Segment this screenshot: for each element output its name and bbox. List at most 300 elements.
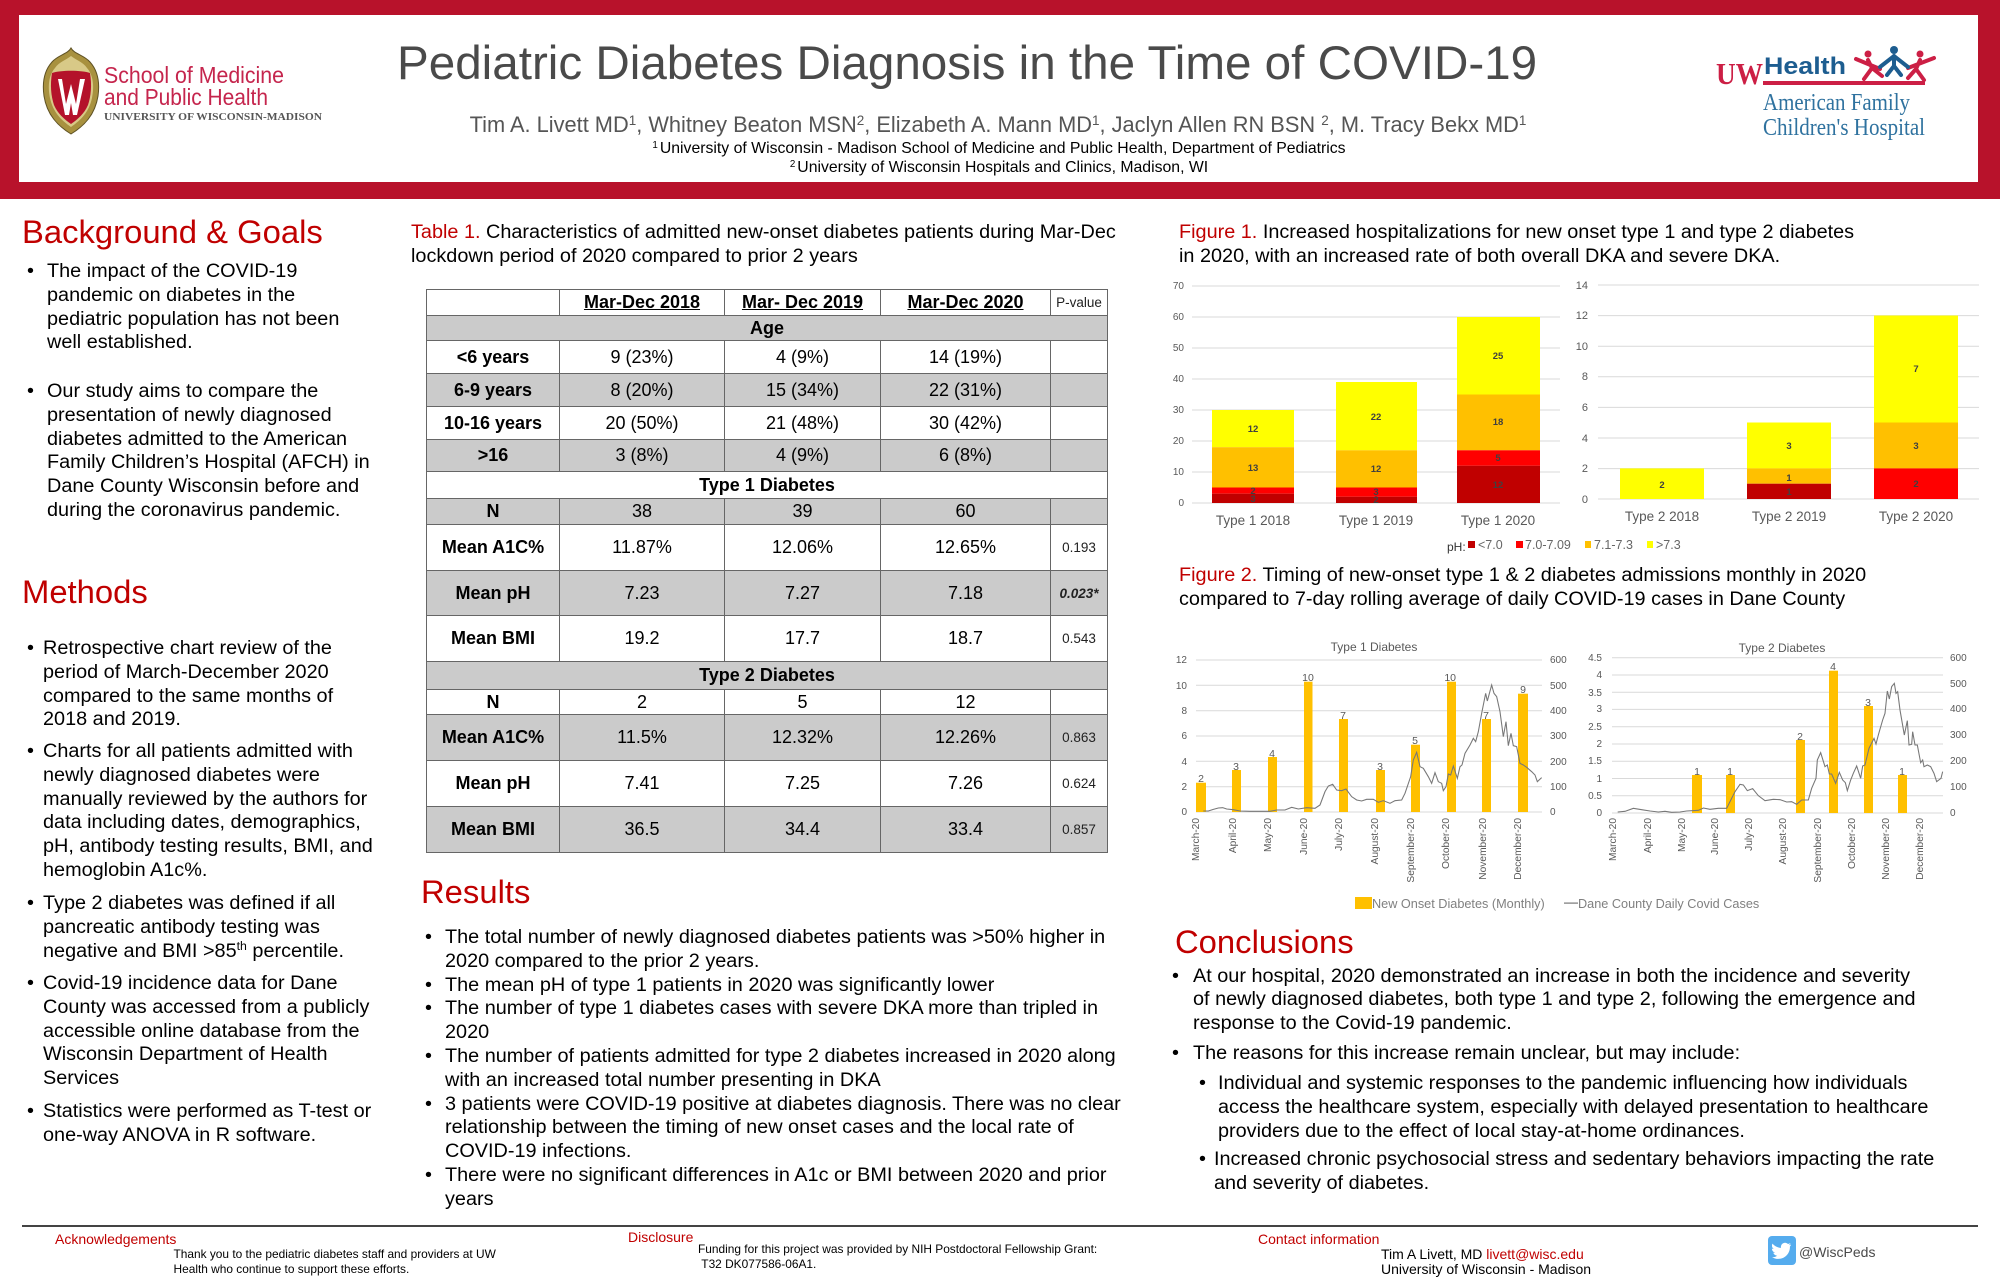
methods bullet 5 — [27, 1100, 371, 1146]
results bullets: The number of patients admitted for type 2 diabetes increased in 2020 along — [445, 1045, 1116, 1067]
table 1: patient characteristics: 0.543 — [1062, 631, 1096, 646]
table 1: patient characteristics: Mean pH — [455, 773, 530, 793]
chart: type 2 monthly admissions and covid cases: 100 — [1950, 782, 1967, 793]
heading: conclusions: Conclusions — [1175, 923, 1354, 960]
chart: type 2 monthly admissions and covid cases: April-20 — [1643, 818, 1654, 853]
table 1: patient characteristics: 8 (20%) — [610, 380, 674, 400]
results bullets: years — [445, 1188, 494, 1210]
conclusions bullet 2: The reasons for this increase remain unclear, but may include: — [1193, 1042, 1740, 1064]
methods bullet 2: pH, antibody testing results, BMI, and — [43, 835, 373, 857]
logo text: and Public Health — [104, 84, 268, 110]
table 1: patient characteristics: 15 (34%) — [766, 380, 839, 400]
table 1: patient characteristics: 36.5 — [624, 819, 660, 839]
chart: type 2 monthly admissions and covid cases: June-20 — [1710, 818, 1721, 855]
chart: type 1 stacked bars by pH: 30 — [1173, 405, 1184, 416]
chart: type 1 monthly admissions and covid cases: 12 — [1176, 655, 1187, 666]
chart: type 1 monthly admissions and covid cases: 200 — [1550, 757, 1567, 768]
chart: type 1 stacked bars by pH: 2 — [1250, 486, 1256, 497]
icon: three holding-hands children — [1856, 46, 1934, 80]
chart: type 1 stacked bars by pH: 18 — [1493, 417, 1503, 428]
chart: type 1 monthly admissions and covid cases: July-20 — [1334, 818, 1345, 851]
table 1: patient characteristics: 7.26 — [948, 773, 983, 793]
table 1: patient characteristics: 7.41 — [624, 773, 660, 793]
methods bullet 2: newly diagnosed diabetes were — [43, 764, 320, 786]
chart: type 2 monthly admissions and covid cases: August-20 — [1778, 818, 1789, 864]
panel: methods: • — [27, 1100, 34, 1122]
legend: diabetes and covid series: Dane County Daily Covid Cases — [1578, 897, 1759, 911]
table 1: patient characteristics: Mar-Dec 2018 — [584, 292, 700, 312]
background bullet 2: presentation of newly diagnosed — [47, 404, 332, 426]
chart: type 2 stacked bars by pH: 2 — [1659, 480, 1665, 491]
chart title: type 1: Type 1 Diabetes — [1331, 640, 1417, 654]
chart: type 2 monthly admissions and covid cases: 2.5 — [1588, 722, 1602, 733]
chart: type 2 monthly admissions and covid cases: March-20 — [1608, 818, 1619, 861]
chart: type 2 stacked bars by pH: 3 — [1913, 441, 1919, 452]
disclosure text — [698, 1242, 1097, 1271]
panel: results: • — [425, 974, 432, 996]
chart: type 1 stacked bars by pH — [1173, 281, 1560, 528]
background bullet 2: Our study aims to compare the — [47, 380, 318, 402]
footer: contact information — [1258, 1231, 1591, 1277]
chart: type 2 monthly admissions and covid cases: 1 — [1727, 766, 1733, 778]
chart: type 1 monthly admissions and covid cases: 400 — [1550, 706, 1567, 717]
conclusions bullet 1: At our hospital, 2020 demonstrated an increase in both the incidence and severity — [1193, 965, 1910, 987]
twitter handle text: @WiscPeds — [1799, 1244, 1875, 1260]
figure 2 caption: Figure 2. Timing of new-onset type 1 & 2 diabetes admissions monthly in 2020 — [1179, 564, 1866, 586]
results bullets: 3 patients were COVID-19 positive at diabetes diagnosis. There was no clear — [445, 1093, 1121, 1115]
chart: type 1 stacked bars by pH: 12 — [1493, 480, 1503, 491]
contact details: Tim A Livett, MD livett@wisc.edu — [1381, 1246, 1584, 1262]
table 1: patient characteristics — [426, 289, 1108, 853]
legend: pH categories: 7.1-7.3 — [1594, 538, 1633, 552]
conclusions sub-bullet 2 — [1199, 1148, 1934, 1194]
chart: type 2 stacked bars by pH: 7 — [1913, 364, 1919, 375]
chart: type 2 stacked bars by pH: 1 — [1786, 487, 1792, 498]
table 1: patient characteristics: 38 — [632, 501, 652, 521]
chart: type 2 monthly admissions and covid cases: 4.5 — [1588, 653, 1602, 664]
conclusions bullet 1: response to the Covid-19 pandemic. — [1193, 1012, 1512, 1034]
chart: type 1 stacked bars by pH: 3 — [1373, 487, 1379, 498]
table 1: patient characteristics: 12.06% — [772, 537, 833, 557]
background bullet 1: pediatric population has not been — [47, 308, 339, 330]
disclosure text: T32 DK077586-06A1. — [701, 1257, 816, 1271]
chart: type 1 monthly admissions and covid cases: 500 — [1550, 681, 1567, 692]
chart: type 1 monthly admissions and covid cases: 8 — [1181, 706, 1187, 717]
table 1: patient characteristics: 4 (9%) — [776, 346, 829, 366]
chart: type 2 stacked bars by pH: Type 2 2018 — [1625, 509, 1699, 524]
chart: type 1 monthly admissions and covid cases: 0 — [1181, 807, 1187, 818]
chart: type 1 stacked bars by pH: 3 — [1250, 494, 1256, 505]
table 1: patient characteristics: Type 2 Diabetes — [699, 665, 835, 685]
methods bullet 4: Services — [43, 1067, 119, 1089]
chart title: type 2: Type 2 Diabetes — [1739, 641, 1825, 655]
UW Health wordmark: Health — [1764, 53, 1846, 80]
table 1: patient characteristics: 39 — [792, 501, 813, 521]
hospital name — [1763, 90, 1925, 141]
results bullets: 2020 compared to the prior 2 years. — [445, 950, 759, 972]
chart: type 2 monthly admissions and covid cases: 1.5 — [1588, 756, 1602, 767]
disclosure text: Funding for this project was provided by NIH Postdoctoral Fellowship Grant: — [698, 1242, 1097, 1256]
table 1: patient characteristics: 12.26% — [935, 727, 996, 747]
chart: type 2 monthly admissions and covid cases — [1588, 641, 1967, 883]
chart: type 1 stacked bars by pH: 60 — [1173, 312, 1184, 323]
panel: results: • — [425, 1045, 432, 1067]
chart: type 1 monthly admissions and covid cases: 4 — [1181, 757, 1187, 768]
table 1: patient characteristics: 3 (8%) — [615, 445, 668, 465]
chart: type 1 monthly admissions and covid cases: 10 — [1444, 672, 1456, 684]
chart: type 1 monthly admissions and covid cases: 3 — [1233, 761, 1239, 773]
background bullet 2: Dane County Wisconsin before and — [47, 475, 359, 497]
header band — [0, 0, 2000, 199]
methods bullet 1 — [27, 637, 334, 730]
figure 1 caption: Figure 1. Increased hospitalizations for new onset type 1 and type 2 diabetes — [1179, 221, 1854, 243]
chart: type 1 monthly admissions and covid cases: 7 — [1483, 710, 1489, 722]
methods bullet 2: Charts for all patients admitted with — [43, 740, 353, 762]
conclusions bullet 1 — [1172, 965, 1916, 1034]
table 1: patient characteristics: 12.65% — [935, 537, 996, 557]
chart: type 1 stacked bars by pH: 50 — [1173, 343, 1184, 354]
chart: type 2 monthly admissions and covid cases: 3 — [1865, 697, 1871, 709]
table 1: patient characteristics: <6 years — [457, 346, 529, 366]
methods bullet 3: pancreatic antibody testing was — [43, 916, 320, 938]
chart: type 2 monthly admissions and covid cases: 200 — [1950, 756, 1967, 767]
chart: type 2 monthly admissions and covid cases: 500 — [1950, 679, 1967, 690]
results bullets: There were no significant differences in A1c or BMI between 2020 and prior — [445, 1164, 1106, 1186]
chart: type 1 stacked bars by pH: 5 — [1495, 453, 1501, 464]
chart: type 1 monthly admissions and covid cases: 600 — [1550, 655, 1567, 666]
chart: type 1 stacked bars by pH: 12 — [1371, 464, 1381, 475]
methods bullet 4: Wisconsin Department of Health — [43, 1043, 328, 1065]
panel: conclusions: • — [1199, 1072, 1206, 1094]
chart: type 2 monthly admissions and covid cases: October-20 — [1847, 818, 1858, 869]
table 1: patient characteristics: P-value — [1056, 295, 1102, 310]
table 1: patient characteristics: Mar- Dec 2019 — [742, 292, 863, 312]
chart: type 2 monthly admissions and covid cases: 3 — [1596, 704, 1602, 715]
results bullets: COVID-19 infections. — [445, 1140, 631, 1162]
table 1: patient characteristics: 22 (31%) — [929, 380, 1002, 400]
methods bullet 1: compared to the same months of — [43, 685, 333, 707]
affiliations — [652, 140, 1346, 176]
chart: type 2 monthly admissions and covid cases: 1 — [1899, 766, 1905, 778]
table 1: patient characteristics: Mean BMI — [451, 628, 535, 648]
panel: methods: • — [27, 740, 34, 762]
contact details: University of Wisconsin - Madison — [1381, 1261, 1591, 1277]
table 1: patient characteristics: Age — [750, 318, 784, 338]
chart: type 1 stacked bars by pH: 12 — [1248, 424, 1258, 435]
footer: disclosure — [628, 1229, 1097, 1271]
chart: type 2 monthly admissions and covid cases: 2 — [1596, 739, 1602, 750]
panel: methods: • — [27, 972, 34, 994]
chart: type 1 stacked bars by pH: 40 — [1173, 374, 1184, 385]
legend: pH categories: >7.3 — [1656, 538, 1681, 552]
methods bullet 5: Statistics were performed as T-test or — [43, 1100, 371, 1122]
chart: type 1 stacked bars by pH: 22 — [1371, 412, 1381, 423]
affiliations: 2University of Wisconsin Hospitals and Clinics, Madison, WI — [790, 159, 1208, 176]
conclusions sub-bullet 1: access the healthcare system, especially with delayed presentation to healthcare — [1218, 1096, 1928, 1118]
table 1: patient characteristics: Mean BMI — [451, 819, 535, 839]
chart: type 1 monthly admissions and covid cases: 10 — [1176, 681, 1187, 692]
chart: type 2 monthly admissions and covid cases: December-20 — [1915, 818, 1926, 880]
footer: acknowledgements — [55, 1231, 496, 1276]
methods bullet 1: Retrospective chart review of the — [43, 637, 332, 659]
panel: results — [421, 873, 1121, 1210]
legend: pH categories: 7.0-7.09 — [1525, 538, 1571, 552]
contact heading: Contact information — [1258, 1231, 1379, 1247]
chart: type 1 stacked bars by pH: 20 — [1173, 436, 1184, 447]
table 1: patient characteristics: 30 (42%) — [929, 412, 1002, 432]
chart: type 1 monthly admissions and covid cases: 7 — [1340, 710, 1346, 722]
table 1: patient characteristics: Mean pH — [455, 582, 530, 602]
panel: conclusions: • — [1172, 965, 1179, 987]
table 1: patient characteristics: 17.7 — [785, 628, 820, 648]
chart: type 2 stacked bars by pH: 12 — [1576, 310, 1588, 322]
background bullet 2: Family Children’s Hospital (AFCH) in — [47, 451, 370, 473]
hospital name: American Family — [1763, 90, 1910, 116]
chart: type 1 monthly admissions and covid cases: 300 — [1550, 731, 1567, 742]
table 1: patient characteristics: 0.857 — [1062, 822, 1096, 837]
chart: type 1 monthly admissions and covid cases: 0 — [1550, 807, 1556, 818]
methods bullet 2: hemoglobin A1c%. — [43, 859, 207, 881]
hospital name: Children's Hospital — [1763, 115, 1925, 141]
chart: type 1 monthly admissions and covid cases: 100 — [1550, 782, 1567, 793]
table 1: patient characteristics: 0.023* — [1059, 586, 1099, 600]
background bullet 2: diabetes admitted to the American — [47, 428, 347, 450]
table 1: patient characteristics: 34.4 — [785, 819, 820, 839]
chart: type 2 stacked bars by pH: 4 — [1582, 433, 1588, 445]
chart: type 1 monthly admissions and covid cases: 5 — [1412, 735, 1418, 747]
table 1: patient characteristics: 0.863 — [1062, 730, 1096, 745]
chart: type 2 monthly admissions and covid cases: 4 — [1830, 661, 1836, 673]
heading: results: Results — [421, 873, 530, 910]
methods bullet 4: accessible online database from the — [43, 1020, 360, 1042]
chart: type 1 monthly admissions and covid cases: 2 — [1198, 773, 1204, 785]
icon: university crest — [43, 48, 99, 134]
table 1: patient characteristics: 7.27 — [785, 582, 820, 602]
chart: type 2 stacked bars by pH: 2 — [1913, 479, 1919, 490]
conclusions sub-bullet 2: and severity of diabetes. — [1214, 1172, 1429, 1194]
acknowledgements text — [174, 1247, 496, 1276]
chart: type 2 monthly admissions and covid cases: 1 — [1596, 774, 1602, 785]
chart: type 1 monthly admissions and covid cases: October-20 — [1441, 818, 1452, 869]
heading: methods: Methods — [22, 573, 148, 610]
table 1: patient characteristics: 14 (19%) — [929, 346, 1002, 366]
table 1: patient characteristics: 21 (48%) — [766, 412, 839, 432]
chart: type 2 monthly admissions and covid cases: 1 — [1694, 766, 1700, 778]
chart: type 1 monthly admissions and covid cases: 9 — [1520, 684, 1526, 696]
chart: type 2 monthly admissions and covid cases: 0.5 — [1588, 791, 1602, 802]
table 1: patient characteristics: 7.25 — [785, 773, 820, 793]
chart: type 1 monthly admissions and covid cases: 4 — [1269, 748, 1275, 760]
chart: type 1 monthly admissions and covid cases: June-20 — [1299, 818, 1310, 855]
panel: conclusions: • — [1199, 1148, 1206, 1170]
results bullets: The number of type 1 diabetes cases with severe DKA more than tripled in — [445, 997, 1098, 1019]
chart: type 2 stacked bars by pH: 6 — [1582, 402, 1588, 414]
table 1: patient characteristics: 11.87% — [612, 537, 672, 557]
panel: conclusions — [1172, 923, 1934, 1194]
table caption — [411, 221, 1116, 267]
chart: type 1 monthly admissions and covid cases — [1176, 640, 1567, 883]
panel: results: • — [425, 1093, 432, 1115]
authors: Tim A. Livett MD1, Whitney Beaton MSN2, Elizabeth A. Mann MD1, Jaclyn Allen RN BSN 2, M. Tracy Bekx MD1 — [470, 112, 1526, 137]
chart: type 1 monthly admissions and covid cases: May-20 — [1263, 818, 1274, 852]
chart: type 1 monthly admissions and covid cases: 2 — [1181, 782, 1187, 793]
table 1: patient characteristics: 2 — [637, 692, 647, 712]
footer rule — [22, 1225, 1978, 1227]
methods bullet 5: one-way ANOVA in R software. — [43, 1124, 316, 1146]
panel: methods: • — [27, 637, 34, 659]
methods bullet 2: manually reviewed by the authors for — [43, 788, 367, 810]
chart: type 2 monthly admissions and covid cases: 300 — [1950, 730, 1967, 741]
methods bullet 4: County was accessed from a publicly — [43, 996, 369, 1018]
conclusions sub-bullet 1 — [1199, 1072, 1928, 1142]
chart: type 2 monthly admissions and covid cases: 3.5 — [1588, 688, 1602, 699]
figure 1 caption — [1179, 221, 1854, 267]
chart: type 2 monthly admissions and covid cases: 4 — [1596, 670, 1602, 681]
chart: type 2 stacked bars by pH: 1 — [1786, 473, 1792, 484]
conclusions sub-bullet 1: Individual and systemic responses to the pandemic influencing how individuals — [1218, 1072, 1907, 1094]
results bullets: The mean pH of type 1 patients in 2020 was significantly lower — [445, 974, 994, 996]
background bullet 2 — [27, 380, 370, 521]
chart: type 2 stacked bars by pH: Type 2 2019 — [1752, 509, 1826, 524]
affiliations: 1University of Wisconsin - Madison School of Medicine and Public Health, Department of Pediatrics — [652, 140, 1346, 157]
figure 2 caption — [1179, 564, 1866, 610]
methods bullet 1: period of March-December 2020 — [43, 661, 329, 683]
logo: School of Medicine and Public Health — [42, 47, 322, 134]
contact details — [1381, 1246, 1591, 1277]
table 1: patient characteristics: 7.18 — [948, 582, 983, 602]
results bullets: 2020 — [445, 1021, 489, 1043]
panel: methods — [22, 573, 373, 1146]
chart: type 1 monthly admissions and covid cases: December-20 — [1513, 818, 1524, 880]
chart: type 1 stacked bars by pH: 2 — [1373, 495, 1379, 506]
background bullet 1: well established. — [47, 331, 193, 353]
table 1: patient characteristics: 33.4 — [948, 819, 983, 839]
conclusions sub-bullet 2: Increased chronic psychosocial stress and sedentary behaviors impacting the rate — [1214, 1148, 1934, 1170]
chart: type 2 stacked bars by pH — [1576, 280, 1979, 524]
figure 2 caption: compared to 7-day rolling average of daily COVID-19 cases in Dane County — [1179, 588, 1845, 610]
chart: type 1 stacked bars by pH: 0 — [1178, 498, 1184, 509]
table caption: lockdown period of 2020 compared to prior 2 years — [411, 245, 858, 267]
background bullet 2: during the coronavirus pandemic. — [47, 499, 340, 521]
chart: type 1 stacked bars by pH: 13 — [1248, 463, 1258, 474]
logo text — [104, 62, 322, 123]
results bullets: with an increased total number presenting in DKA — [445, 1069, 881, 1091]
chart: type 1 monthly admissions and covid cases: August-20 — [1370, 818, 1381, 864]
UW Health wordmark — [1716, 53, 1925, 91]
chart: type 2 stacked bars by pH: Type 2 2020 — [1879, 509, 1953, 524]
chart: type 1 monthly admissions and covid cases: September-20 — [1406, 818, 1417, 883]
table 1: patient characteristics: 10-16 years — [444, 412, 542, 432]
methods bullet 3: Type 2 diabetes was defined if all — [43, 892, 335, 914]
results bullets: The total number of newly diagnosed diabetes patients was >50% higher in — [445, 926, 1105, 948]
UW Health wordmark: UW — [1716, 56, 1763, 91]
methods bullet 4: Covid-19 incidence data for Dane — [43, 972, 338, 994]
legend: diabetes and covid series — [1355, 897, 1759, 911]
legend: pH categories: <7.0 — [1478, 538, 1503, 552]
methods bullet 2: data including dates, demographics, — [43, 811, 361, 833]
table 1: patient characteristics: 12.32% — [772, 727, 833, 747]
figure 1 caption: in 2020, with an increased rate of both overall DKA and severe DKA. — [1179, 245, 1780, 267]
results bullets: relationship between the timing of new onset cases and the local rate of — [445, 1116, 1074, 1138]
logo text: UNIVERSITY OF WISCONSIN-MADISON — [104, 112, 322, 123]
table 1: patient characteristics: Type 1 Diabetes — [699, 474, 835, 494]
chart: type 2 monthly admissions and covid cases: 0 — [1596, 808, 1602, 819]
panel: methods: • — [27, 892, 34, 914]
table 1: patient characteristics: 12 — [955, 692, 976, 712]
table 1: patient characteristics: 7.23 — [624, 582, 660, 602]
chart: type 2 monthly admissions and covid cases: 0 — [1950, 808, 1956, 819]
methods bullet 3: negative and BMI >85th percentile. — [43, 939, 344, 962]
chart: type 2 monthly admissions and covid cases: July-20 — [1744, 818, 1755, 851]
chart: type 2 stacked bars by pH: 2 — [1582, 463, 1588, 475]
table 1: patient characteristics: 5 — [797, 692, 808, 712]
table 1: patient characteristics: Mean A1C% — [442, 727, 544, 747]
chart: type 1 stacked bars by pH: 70 — [1173, 281, 1184, 292]
table 1: patient characteristics: 19.2 — [624, 628, 660, 648]
panel: background and goals: • — [27, 260, 34, 282]
methods bullet 2 — [27, 740, 373, 881]
chart: type 1 stacked bars by pH: 10 — [1173, 467, 1184, 478]
disclosure heading: Disclosure — [628, 1229, 693, 1245]
chart: type 1 monthly admissions and covid cases: November-20 — [1478, 818, 1489, 880]
chart: type 2 monthly admissions and covid cases: 600 — [1950, 653, 1967, 664]
results bullets — [425, 926, 1121, 1210]
legend: diabetes and covid series: New Onset Diabetes (Monthly) — [1372, 897, 1545, 911]
table 1: patient characteristics: 20 (50%) — [605, 412, 679, 432]
panel: background and goals — [22, 213, 370, 521]
chart: type 1 monthly admissions and covid cases: April-20 — [1228, 818, 1239, 853]
chart: type 2 monthly admissions and covid cases: 2 — [1797, 731, 1803, 743]
table 1: patient characteristics: 6 (8%) — [939, 445, 992, 465]
chart: type 1 monthly admissions and covid cases: March-20 — [1191, 818, 1202, 861]
table 1: patient characteristics: Mar-Dec 2020 — [907, 292, 1024, 312]
table 1: patient characteristics: 0.193 — [1062, 540, 1096, 555]
chart: type 1 monthly admissions and covid cases: 10 — [1302, 672, 1314, 684]
legend: pH categories — [1447, 538, 1681, 554]
chart: type 2 monthly admissions and covid cases: 400 — [1950, 704, 1967, 715]
chart: type 2 stacked bars by pH: 0 — [1582, 494, 1588, 506]
acknowledgements text: Thank you to the pediatric diabetes staff and providers at UW — [174, 1247, 496, 1261]
methods bullet 1: 2018 and 2019. — [43, 708, 181, 730]
table 1: patient characteristics: Mean A1C% — [442, 537, 544, 557]
logo: UW Health American Family Children's Hospital — [1716, 46, 1936, 141]
chart: type 2 monthly admissions and covid cases: May-20 — [1677, 818, 1688, 852]
chart: type 1 monthly admissions and covid cases: 6 — [1181, 731, 1187, 742]
chart: type 1 monthly admissions and covid cases: 3 — [1377, 761, 1383, 773]
panel: results: • — [425, 1164, 432, 1186]
methods bullet 4 — [27, 972, 370, 1089]
methods bullet 3 — [27, 892, 344, 962]
table 1: patient characteristics: 4 (9%) — [776, 445, 829, 465]
background bullet 1: pandemic on diabetes in the — [47, 284, 295, 306]
chart: type 1 stacked bars by pH: Type 1 2018 — [1216, 513, 1290, 528]
chart: type 2 stacked bars by pH: 14 — [1576, 280, 1588, 292]
chart: type 1 stacked bars by pH: 25 — [1493, 351, 1504, 362]
acknowledgements text: Health who continue to support these efforts. — [174, 1262, 409, 1276]
table 1: patient characteristics: >16 — [478, 445, 508, 465]
title: Pediatric Diabetes Diagnosis in the Time of COVID-19 — [397, 37, 1537, 90]
table 1: patient characteristics: 9 (23%) — [610, 346, 674, 366]
chart: type 2 stacked bars by pH: 3 — [1786, 441, 1792, 452]
chart: type 1 stacked bars by pH: Type 1 2020 — [1461, 513, 1535, 528]
heading: background and goals: Background & Goals — [22, 213, 323, 250]
table 1: patient characteristics: N — [486, 501, 500, 521]
chart: type 1 stacked bars by pH: Type 1 2019 — [1339, 513, 1413, 528]
panel: results: • — [425, 997, 432, 1019]
background bullet 1: The impact of the COVID-19 — [47, 260, 297, 282]
chart: type 2 stacked bars by pH: 10 — [1576, 341, 1588, 353]
table 1: patient characteristics: 60 — [955, 501, 976, 521]
